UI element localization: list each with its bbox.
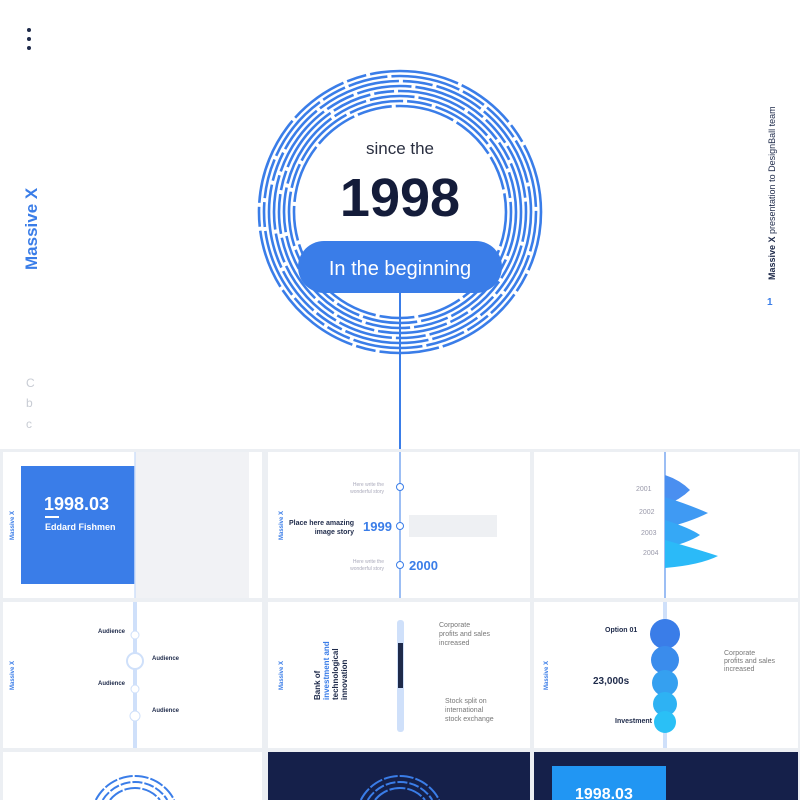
panel: thumb bank: increased [439,640,469,647]
panel: main slide [0,0,800,449]
panel: thumb bank: innovation [340,659,349,700]
panel: thumb bank: investment and [322,641,331,700]
panel: thumb audience: Audience [98,629,126,635]
panel: thumb bank: Bank of [313,670,322,700]
panel: thumb 1999 timeline [268,452,530,598]
page number: 1 [767,297,773,308]
panel: thumb bank: technological [331,648,340,700]
pill: In the beginning [298,241,502,293]
panel: thumb 1999 timeline: 1999 [363,519,392,534]
panel: thumb audience [3,602,262,748]
panel: thumb SWOT: Corporate [724,650,755,657]
panel: thumb 1999 timeline: wonderful story [350,566,384,572]
graphic: dashed ring circle [259,71,541,353]
panel: thumb 1999 timeline: Massive X [279,511,285,540]
panel: thumb audience: Audience [98,681,126,687]
panel: thumb bank: Stock split on [445,698,487,705]
panel: thumb SWOT: increased [724,666,754,673]
panel: thumb 1999 timeline: image story [315,529,354,536]
icon: menu dots [27,28,31,50]
panel: thumb 1999 timeline: Place here amazing [289,520,354,527]
panel: thumb SWOT: profits and sales [724,658,775,665]
panel: thumb SWOT: 23,000s [593,676,630,687]
panel: thumb SWOT: Investment [615,718,653,725]
panel: thumb waves: 2002 [639,509,655,516]
side letters: b [26,396,33,410]
panel: thumb 1998.03: 1998.03 [44,494,109,514]
pill: In the beginning: In the beginning [329,258,471,280]
text: 1998: 1998 [340,168,460,228]
panel: thumb SWOT [534,602,798,748]
panel: thumb row3 dark 1998 [534,752,798,800]
side letters [26,376,35,431]
panel: thumb row3 circle [3,752,262,800]
panel: thumb 1998.03 [3,452,262,598]
panel: thumb 1999 timeline: Here write the [353,482,384,488]
side letters: c [26,417,32,431]
panel: thumb audience: Massive X [10,661,16,690]
right caption: Massive X presentation to DesignBall team [767,106,777,280]
panel: thumb 1999 timeline: wonderful story [350,489,384,495]
panel: thumb 1998.03: Eddard Fishmen [45,522,116,532]
text: since the: since the [366,139,434,158]
panel: thumb bank: Corporate [439,622,470,629]
panel: thumb bank: profits and sales [439,631,490,638]
timeline line [399,293,401,449]
panel: thumb 1999 timeline: Here write the [353,559,384,565]
side letters: C [26,376,35,390]
panel: thumb row3 dark [268,752,530,800]
panel: thumb SWOT: Massive X [544,661,550,690]
panel: thumb waves: 2001 [636,486,652,493]
panel: thumb waves [534,452,798,598]
panel: thumb SWOT: Option 01 [605,627,637,634]
panel: thumb 1999 timeline: 2000 [409,558,438,573]
side title: Massive X: Massive X [22,187,41,270]
panel: thumb bank [268,602,530,748]
panel: thumb waves: 2004 [643,550,659,557]
panel: thumb 1998.03: Massive X [10,511,16,540]
panel: thumb waves: 2003 [641,530,657,537]
panel: thumb audience: Audience [152,708,180,714]
panel: thumb audience: Audience [152,656,180,662]
panel: thumb bank: Massive X [279,661,285,690]
panel: thumb bank: stock exchange [445,716,494,723]
panel: thumb bank: international [445,707,484,714]
